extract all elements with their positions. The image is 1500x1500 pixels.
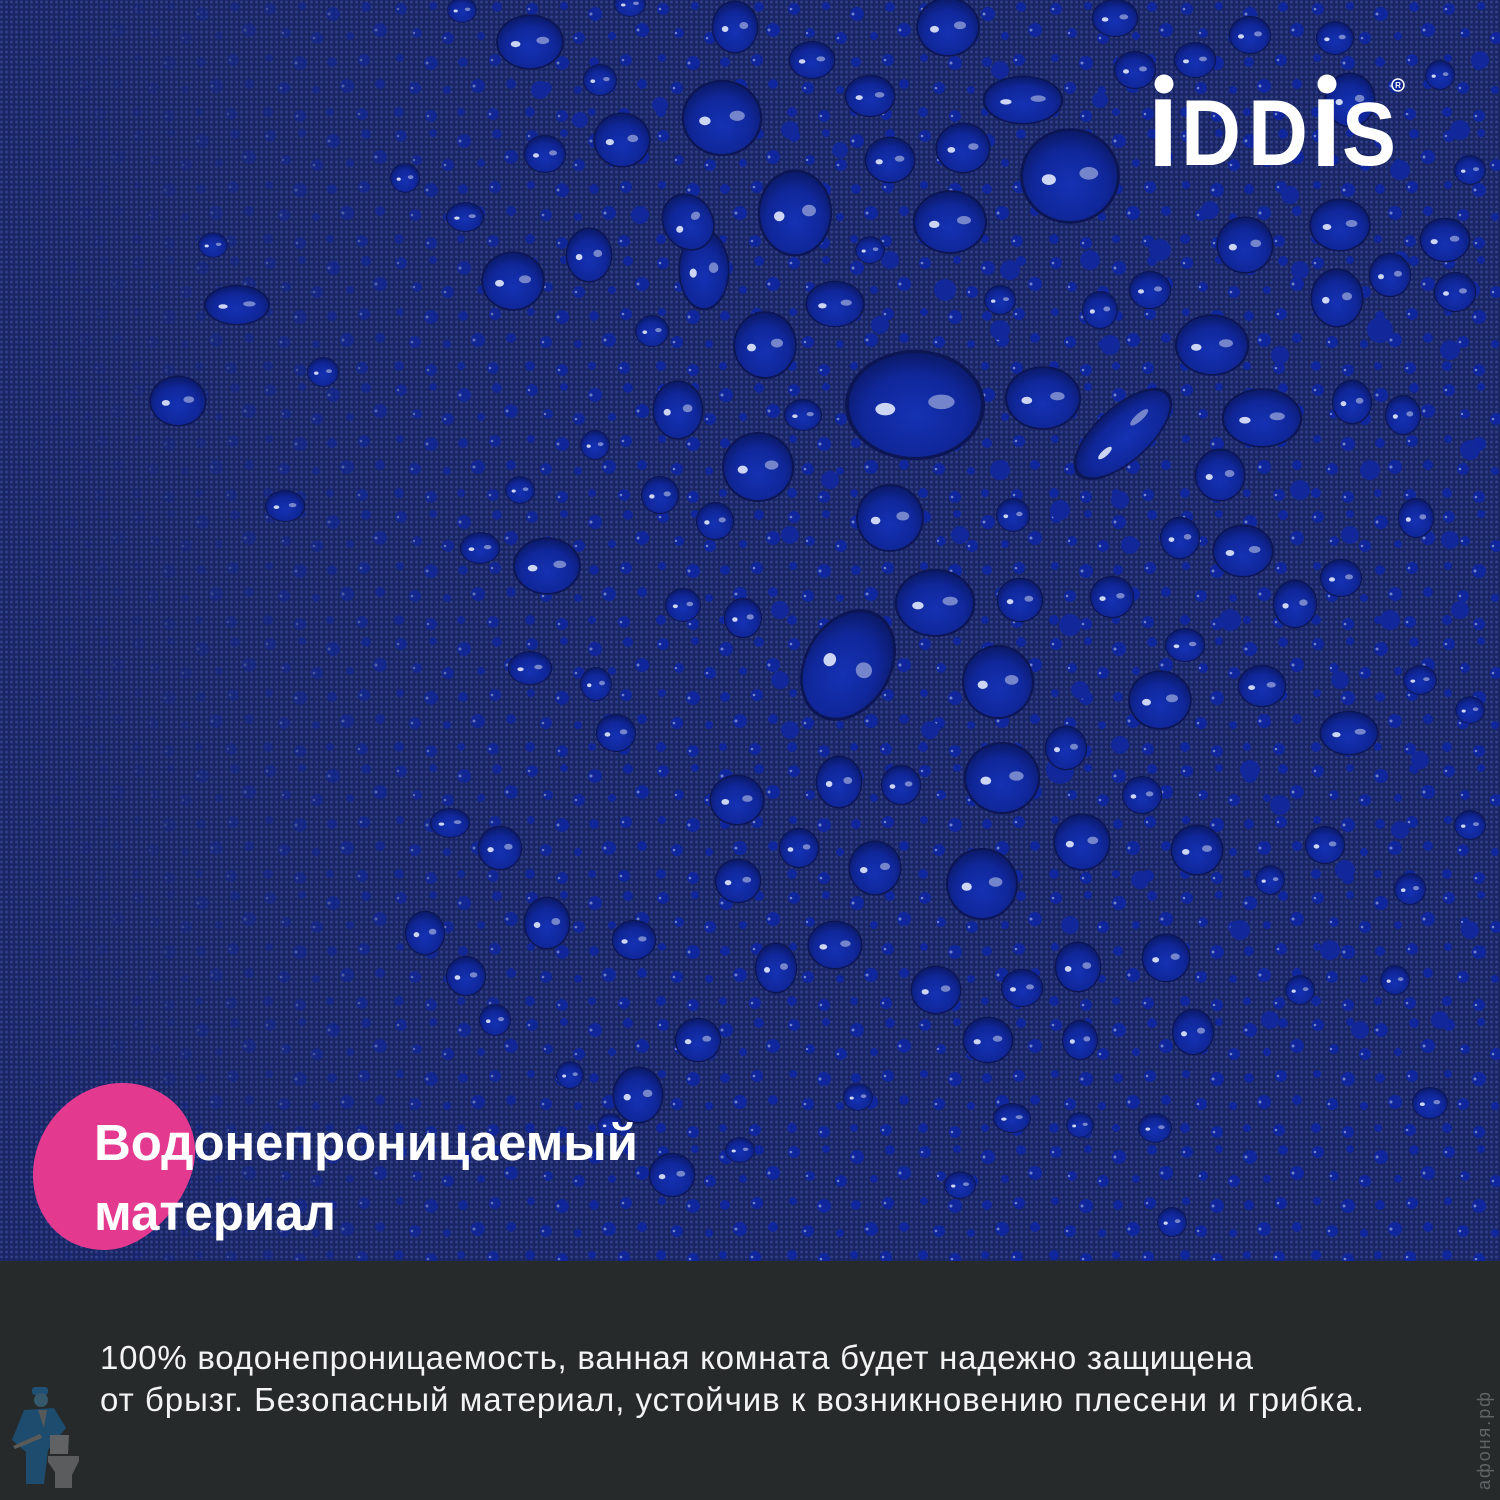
small droplets [531,51,1489,1039]
logo: IDDIS: R [1395,81,1401,90]
icon: plumber mascot with toilet [12,1387,79,1488]
body text [100,1339,1364,1418]
logo: IDDIS: I [1150,80,1176,185]
body text: 100% водонепроницаемость, ванная комната будет надежно защищена [100,1339,1254,1376]
heading [94,1114,638,1241]
bottom dark band [0,1261,1500,1500]
logo: IDDIS: D [1248,80,1308,185]
logo: IDDIS [1150,74,1404,185]
watermark: афоня.рф [1474,1392,1494,1490]
heading: Водонепроницаемый [94,1114,638,1171]
heading: материал [94,1184,336,1241]
pink blob [33,1083,195,1250]
logo: IDDIS: S [1342,85,1396,185]
body text: от брызг. Безопасный материал, устойчив к возникновению плесени и грибка. [100,1381,1364,1418]
logo: IDDIS: D [1181,80,1241,185]
logo: IDDIS: I [1313,80,1339,185]
medium and large drops [149,0,1486,1237]
